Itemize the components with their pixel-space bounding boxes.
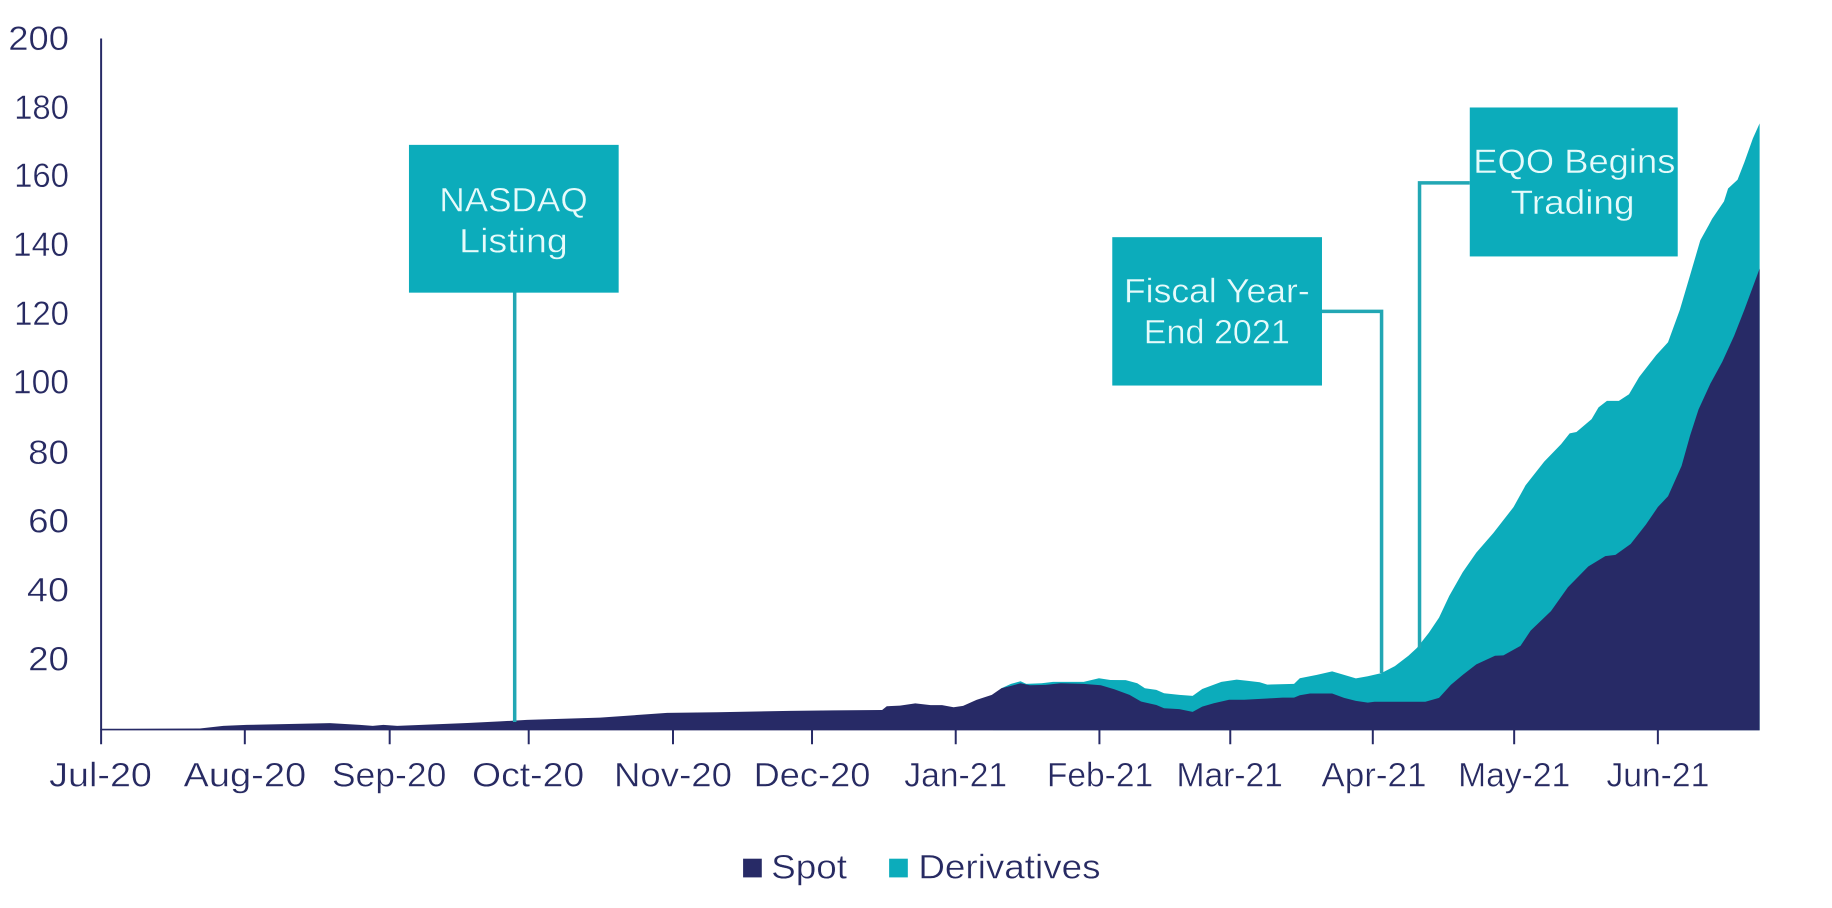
y axis labels: 40 [27, 572, 69, 610]
callout: EQO Begins Trading: Trading [1511, 184, 1635, 222]
x axis labels [49, 756, 1709, 794]
y axis labels: 60 [28, 503, 69, 541]
legend [743, 849, 1101, 887]
y axis labels: 180 [14, 89, 69, 127]
y axis labels: 160 [14, 157, 69, 195]
y axis labels: 200 [8, 20, 69, 58]
y axis labels: 20 [28, 641, 69, 679]
callout: NASDAQ Listing: Listing [459, 222, 568, 260]
x axis labels: Feb-21 [1047, 756, 1153, 794]
x axis labels: Dec-20 [754, 756, 870, 794]
y axis labels: 140 [13, 226, 69, 264]
x axis labels: Oct-20 [472, 756, 584, 794]
x axis labels: Aug-20 [183, 756, 306, 794]
x axis labels: Jul-20 [49, 756, 152, 794]
x axis labels: Jun-21 [1606, 756, 1709, 794]
x axis labels: Mar-21 [1177, 756, 1283, 794]
y axis labels: 120 [14, 295, 69, 333]
legend: Derivatives [918, 849, 1101, 887]
y axis labels: 80 [28, 434, 69, 472]
x axis labels: Sep-20 [332, 756, 446, 794]
callout: NASDAQ Listing: NASDAQ [439, 181, 588, 219]
y axis labels: 100 [13, 364, 69, 402]
callout: Fiscal Year-End 2021 [1112, 237, 1382, 673]
y axis labels [8, 20, 69, 679]
callout: NASDAQ Listing [409, 145, 619, 722]
x axis labels: Jan-21 [904, 756, 1007, 794]
callout: EQO Begins Trading [1420, 107, 1678, 648]
x axis labels: Apr-21 [1321, 756, 1427, 794]
x axis labels: May-21 [1458, 756, 1570, 794]
legend: Spot [771, 849, 848, 887]
callout: Fiscal Year-End 2021: End 2021 [1144, 313, 1290, 351]
spot area [101, 269, 1760, 730]
callout: EQO Begins Trading: EQO Begins [1473, 143, 1675, 181]
axes and ticks [101, 39, 1658, 744]
derivatives area [993, 123, 1760, 730]
x axis labels: Nov-20 [614, 756, 732, 794]
callout: Fiscal Year-End 2021: Fiscal Year- [1124, 273, 1310, 311]
